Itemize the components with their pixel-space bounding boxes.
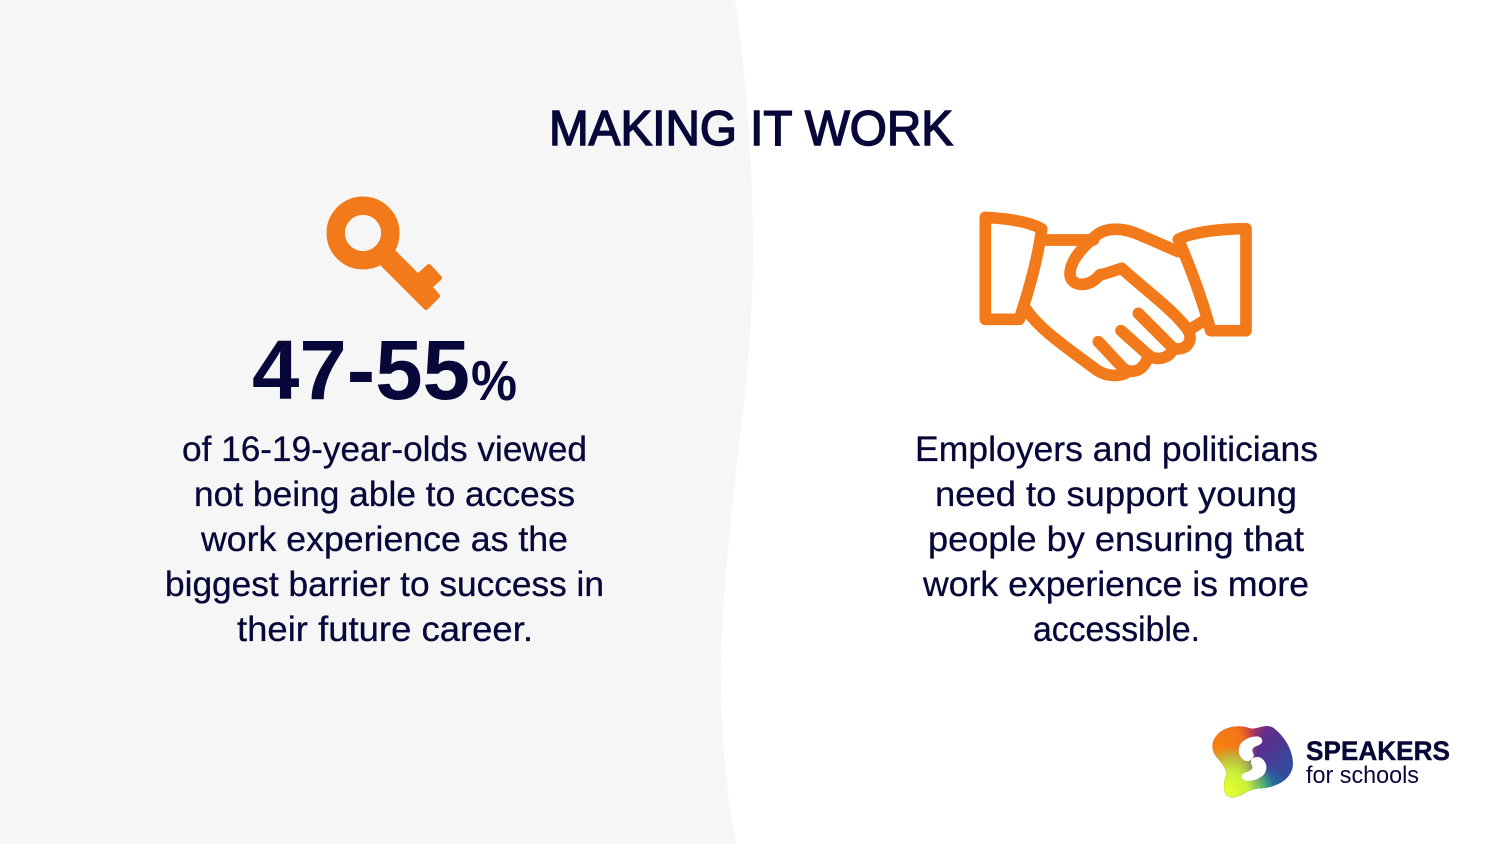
logo wordmark: SPEAKERS bbox=[1306, 736, 1450, 766]
title: MAKING IT WORK bbox=[549, 102, 953, 156]
text block: call to action: Employers and politicians bbox=[915, 430, 1318, 469]
text block: barrier statistic description: not being able to access bbox=[194, 475, 575, 514]
statistic: 47-55%: % bbox=[471, 349, 517, 413]
text block: barrier statistic description: their future career. bbox=[237, 610, 533, 649]
logo: Speakers for Schools bbox=[1212, 726, 1450, 798]
icon: handshake bbox=[985, 217, 1246, 375]
text block: call to action: people by ensuring that bbox=[928, 520, 1304, 559]
logo: Speakers for Schools: for schools bbox=[1306, 762, 1419, 789]
statistic: 47-55%: 47-55 bbox=[252, 323, 470, 417]
logo gradient overlays bbox=[1212, 726, 1293, 798]
icon: white S in logo bbox=[1239, 737, 1266, 781]
background: grey wavy left panel bbox=[0, 0, 753, 844]
text block: call to action: need to support young bbox=[935, 475, 1297, 514]
text block: call to action bbox=[915, 430, 1318, 649]
text block: barrier statistic description: biggest barrier to success in bbox=[165, 565, 604, 604]
text block: barrier statistic description: of 16-19-year-olds viewed bbox=[182, 430, 587, 469]
text block: barrier statistic description bbox=[165, 430, 604, 649]
icon: key bbox=[336, 206, 442, 310]
text block: barrier statistic description: work experience as the bbox=[200, 520, 568, 559]
text block: call to action: work experience is more bbox=[922, 565, 1309, 604]
text block: call to action: accessible. bbox=[1033, 610, 1200, 649]
icon: rainbow blob logo mark bbox=[1212, 726, 1293, 797]
